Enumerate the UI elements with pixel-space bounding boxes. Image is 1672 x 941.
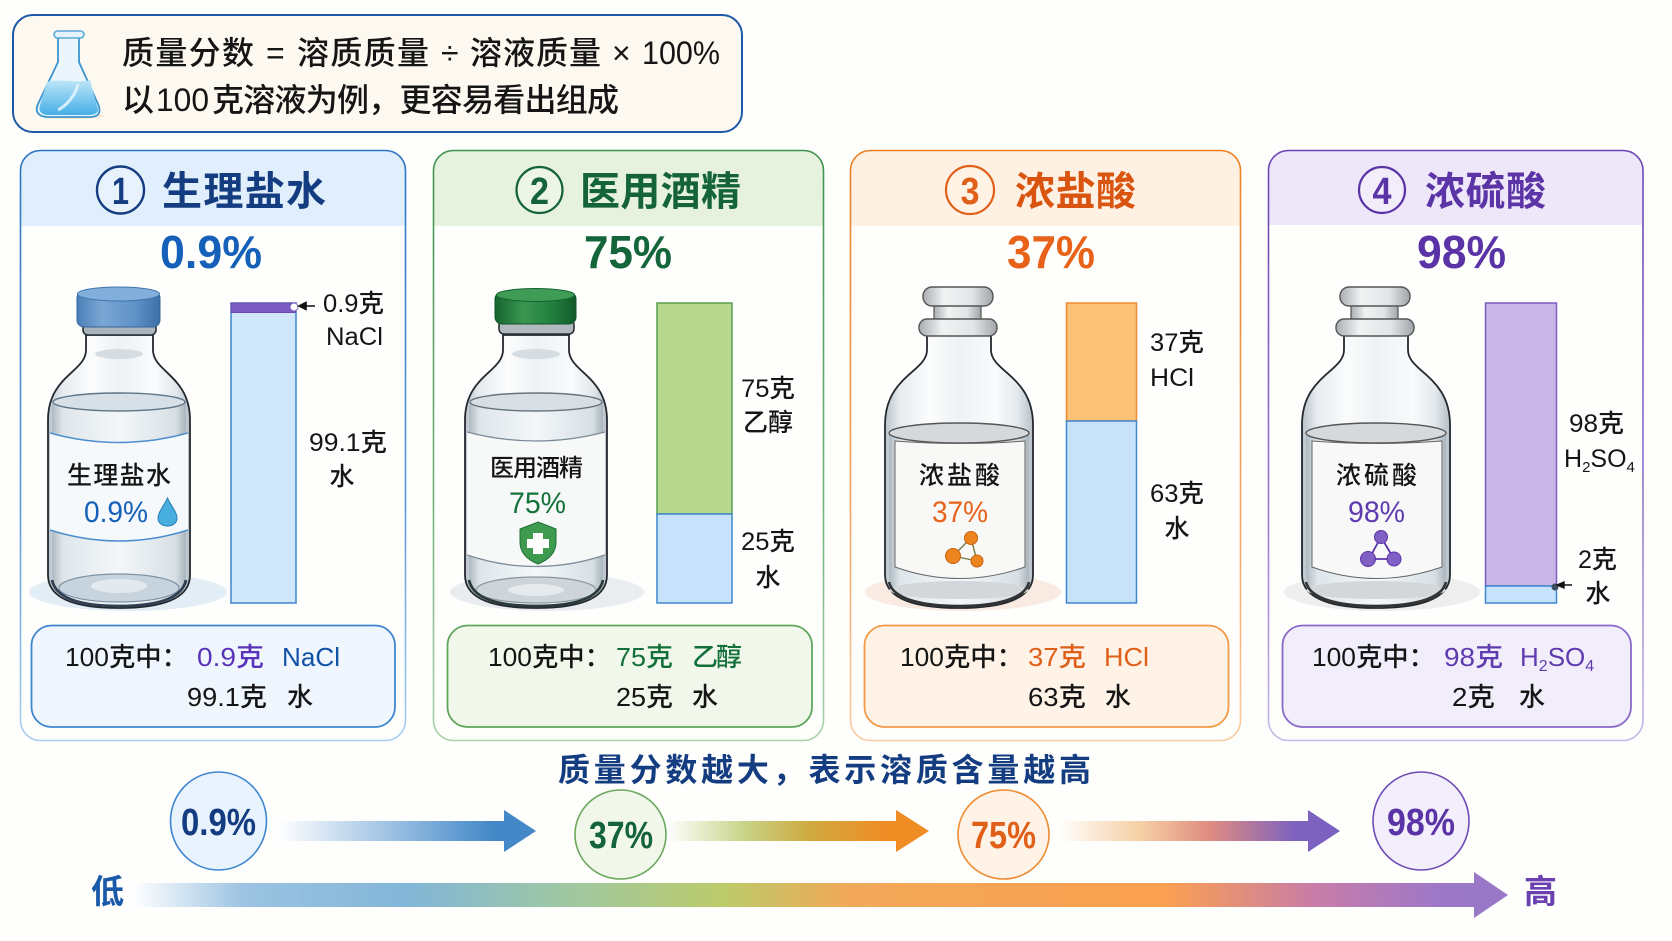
summary box: SO <box>1548 642 1585 672</box>
summary box: H <box>1520 642 1539 672</box>
summary box: NaCl <box>282 642 340 672</box>
bottle: 浓硫酸 <box>1336 462 1417 490</box>
bottle: 浓盐酸 <box>919 462 1000 490</box>
heading: 3 <box>960 171 980 213</box>
label <box>895 441 1025 578</box>
bar labels <box>1150 329 1204 543</box>
label <box>467 432 605 566</box>
bar labels <box>1564 410 1635 608</box>
bar labels: 水 <box>755 564 781 592</box>
formula note: 以 <box>122 82 154 118</box>
cap <box>83 322 156 335</box>
bar labels: 2克 <box>1578 546 1617 574</box>
summary box <box>448 626 812 727</box>
bar labels <box>741 375 795 592</box>
summary box: 4 <box>1585 658 1594 675</box>
arrow: low to 37% <box>277 810 536 852</box>
summary box: 99.1克 <box>187 682 267 712</box>
formula text: 溶质质量 <box>297 35 429 71</box>
icon: water drop <box>158 498 177 526</box>
icon: flask <box>37 31 104 119</box>
label <box>1312 441 1442 578</box>
bottle <box>865 287 1061 611</box>
panel: 医用酒精 <box>434 150 824 740</box>
summary box: 乙醇 <box>692 642 742 672</box>
summary box: 水 <box>1105 682 1131 712</box>
heading: 浓硫酸 <box>1425 170 1546 214</box>
bottle: 75% <box>509 487 566 520</box>
bar labels: H <box>1564 445 1582 473</box>
formula text: ÷ <box>441 35 459 71</box>
summary box <box>1282 626 1631 727</box>
stacked bar <box>1486 303 1572 603</box>
stopper <box>1336 287 1414 336</box>
stacked bar <box>231 302 315 603</box>
summary box: 37克 <box>1028 642 1086 672</box>
summary box <box>32 626 395 727</box>
bar labels: 4 <box>1627 459 1635 476</box>
bar labels: 25克 <box>741 528 795 556</box>
bar labels <box>309 290 387 491</box>
heading <box>946 166 1136 214</box>
heading <box>1359 167 1546 214</box>
bar labels: 乙醇 <box>743 409 793 437</box>
formula note: 100 <box>156 82 209 118</box>
heading <box>97 166 326 214</box>
summary box: 水 <box>692 682 718 712</box>
bar labels: SO <box>1590 445 1627 473</box>
icon: molecule <box>1360 530 1401 566</box>
bar labels: 98克 <box>1569 410 1624 438</box>
summary box: 100克中： <box>900 642 1023 672</box>
summary box: 2 <box>1539 658 1548 675</box>
bottle: 医用酒精 <box>490 455 583 482</box>
circle: 37% <box>575 790 666 879</box>
formula text: = <box>266 35 285 71</box>
bottle: 0.9% <box>84 496 148 529</box>
percentage: 98% <box>1417 226 1506 278</box>
panel: 生理盐水 <box>20 150 406 740</box>
bottle <box>450 288 644 611</box>
summary box: HCl <box>1104 642 1149 672</box>
formula text: 质量分数 <box>122 35 254 71</box>
percentage: 75% <box>584 226 672 278</box>
heading: 2 <box>530 171 549 213</box>
circle: 0.9%: 0.9% <box>181 802 256 844</box>
bar labels: 37克 <box>1150 329 1204 357</box>
bar labels: 水 <box>329 463 355 491</box>
bottle <box>29 287 227 611</box>
summary box: 98克 <box>1444 642 1503 672</box>
bar labels: NaCl <box>326 323 383 351</box>
summary box: 水 <box>287 682 313 712</box>
circle: 75% <box>958 790 1049 879</box>
panel: 浓硫酸 <box>1268 150 1643 740</box>
formula note: 克溶液为例，更容易看出组成 <box>212 82 619 118</box>
heading: 1 <box>112 171 129 213</box>
summary box: 100克中： <box>1312 642 1435 672</box>
arrow: 75% to 98% <box>1057 810 1340 852</box>
summary box: 25克 <box>616 682 673 712</box>
stacked bar <box>1066 303 1136 603</box>
low label: 低 <box>91 873 124 910</box>
bar labels: 63克 <box>1150 480 1204 508</box>
formula text: 100% <box>642 35 720 71</box>
summary box: 100克中： <box>488 642 611 672</box>
summary box: 100克中： <box>65 642 188 672</box>
heading: 医用酒精 <box>580 170 741 214</box>
summary box: 水 <box>1519 682 1545 712</box>
summary box: 63克 <box>1028 682 1086 712</box>
icon: molecule <box>946 532 983 567</box>
percentage: 0.9% <box>160 226 262 278</box>
bottle: 生理盐水 <box>67 462 171 490</box>
bar labels: 75克 <box>741 375 795 403</box>
formula header box <box>13 15 742 132</box>
circle: 98% <box>1373 772 1469 870</box>
conclusion heading: 质量分数越大，表示溶质含量越高 <box>558 752 1091 788</box>
circle: 0.9% <box>170 772 266 870</box>
circle: 75%: 75% <box>971 815 1036 857</box>
formula text: 溶液质量 <box>470 35 601 71</box>
circle: 37%: 37% <box>589 815 653 857</box>
bar labels: 水 <box>1585 580 1611 608</box>
bar labels: 水 <box>1164 515 1190 543</box>
summary box: 0.9克 <box>197 642 264 672</box>
bottle: 37% <box>932 496 988 529</box>
heading <box>516 167 741 214</box>
cap <box>499 320 574 334</box>
circle: 98%: 98% <box>1387 802 1455 844</box>
bar labels: HCl <box>1150 364 1194 392</box>
heading: 生理盐水 <box>162 170 326 214</box>
arrow: 37% to 75% <box>667 810 929 852</box>
panel: 浓盐酸 <box>850 150 1240 740</box>
summary box: 2克 <box>1452 682 1495 712</box>
bottle: 98% <box>1348 496 1405 529</box>
summary box <box>864 626 1228 727</box>
bar labels: 0.9克 <box>323 290 384 318</box>
stopper <box>919 287 997 336</box>
formula text <box>122 35 720 71</box>
stacked bar <box>657 303 732 603</box>
bottle <box>1284 287 1480 611</box>
summary box: 75克 <box>616 642 673 672</box>
icon: shield <box>520 522 556 564</box>
percentage: 37% <box>1007 226 1095 278</box>
gradient scale arrow <box>133 872 1508 918</box>
bar labels: 99.1克 <box>309 429 387 457</box>
heading: 浓盐酸 <box>1015 170 1136 214</box>
formula text: × <box>612 35 631 71</box>
bar labels: 2 <box>1582 459 1590 476</box>
label <box>50 433 188 541</box>
heading: 4 <box>1372 171 1392 213</box>
high label: 高 <box>1524 873 1557 910</box>
